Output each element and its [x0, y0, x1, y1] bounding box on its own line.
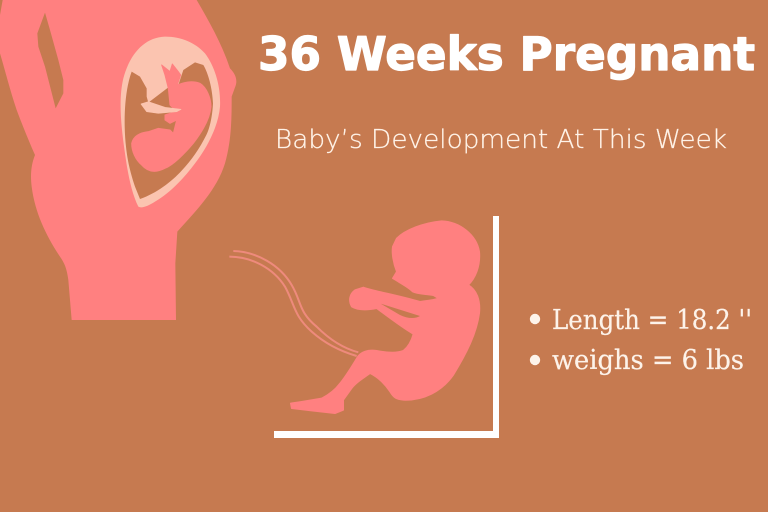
amniotic cavity [125, 62, 213, 199]
measurements list [530, 305, 752, 376]
fetus in womb [132, 64, 211, 171]
corner axis lines [274, 216, 499, 438]
bullet: weight: weighs = 6 lbs [552, 345, 744, 376]
subtitle: Baby’s Development At This Week [275, 125, 727, 155]
baby illustration with umbilical cord [229, 221, 480, 413]
bullet: length: Length = 18.2 '' [552, 305, 752, 336]
umbilical cord [229, 251, 358, 356]
mother silhouette with womb and fetus [0, 0, 236, 320]
womb [121, 37, 220, 207]
baby silhouette [291, 221, 480, 413]
title: 36 Weeks Pregnant [258, 27, 755, 81]
fetus arm [141, 102, 181, 113]
